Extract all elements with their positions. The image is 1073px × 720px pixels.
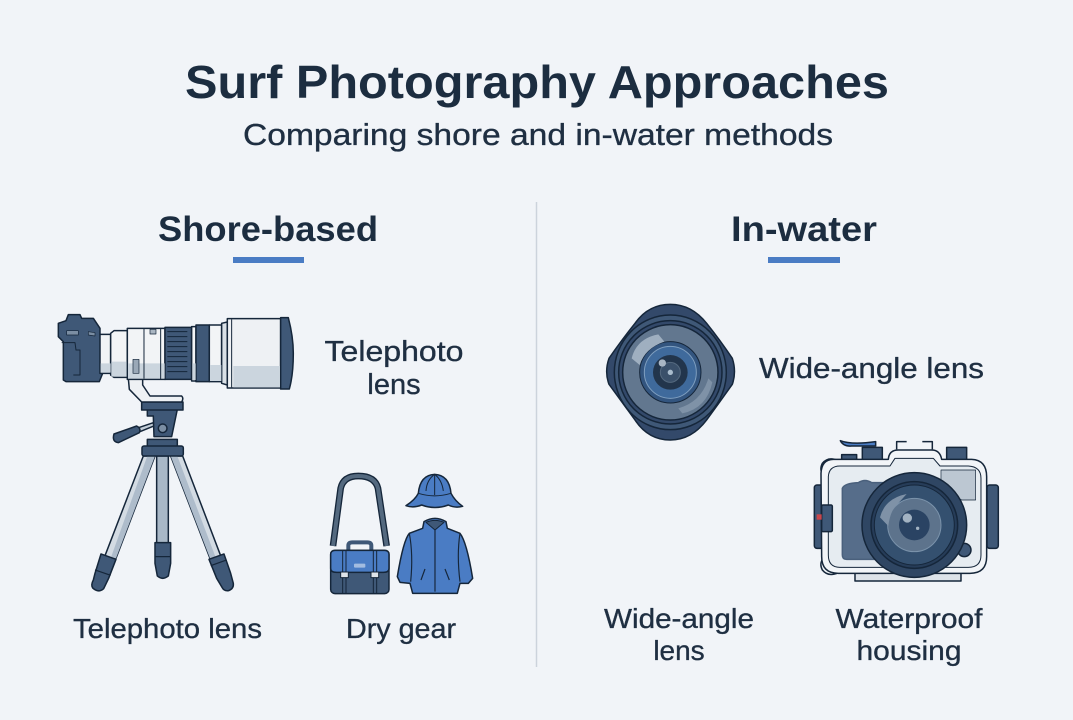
panel: in-water [604,210,998,666]
top controls [840,441,876,446]
label: waterproof housing: Waterproof [836,603,983,634]
label: waterproof housing: housing [856,635,962,666]
title: Surf Photography Approaches [185,56,889,108]
tripod head [147,439,177,447]
label: wide-angle lens bottom: lens [653,635,705,666]
tripod legs [104,456,155,558]
icon: waterproof housing camera [814,441,998,581]
panel: shore-based [58,210,473,644]
bag [348,542,371,551]
jacket [397,518,473,593]
heading: in-water: In-water [731,210,877,249]
label: telephoto lens top: Telephoto [324,336,464,368]
side latch [822,505,832,532]
label: telephoto lens top: lens [367,369,421,401]
heading underline [768,257,840,263]
label: wide-angle lens right: Wide-angle lens [759,353,984,385]
bag strap [333,476,387,546]
label: telephoto lens bottom: Telephoto lens [73,613,262,644]
grey plate [941,470,976,500]
subtitle: Comparing shore and in-water methods [243,117,833,152]
heading: shore-based: Shore-based [158,210,378,249]
clear housing body [821,450,987,573]
front lens [862,473,967,577]
icon: dry gear bag, hat and jacket [331,474,473,594]
base and handles [855,572,961,581]
icon: wide-angle lens [607,304,734,440]
housing corner bumps [821,459,838,475]
icon: telephoto camera on tripod [58,315,293,591]
label: dry gear: Dry gear [346,613,456,644]
lens barrel [100,334,111,373]
camera body [58,315,103,382]
internal camera [842,480,905,559]
hat [406,474,463,507]
label: wide-angle lens bottom: Wide-angle [604,603,754,634]
heading underline [233,257,304,263]
tripod feet [92,554,116,591]
